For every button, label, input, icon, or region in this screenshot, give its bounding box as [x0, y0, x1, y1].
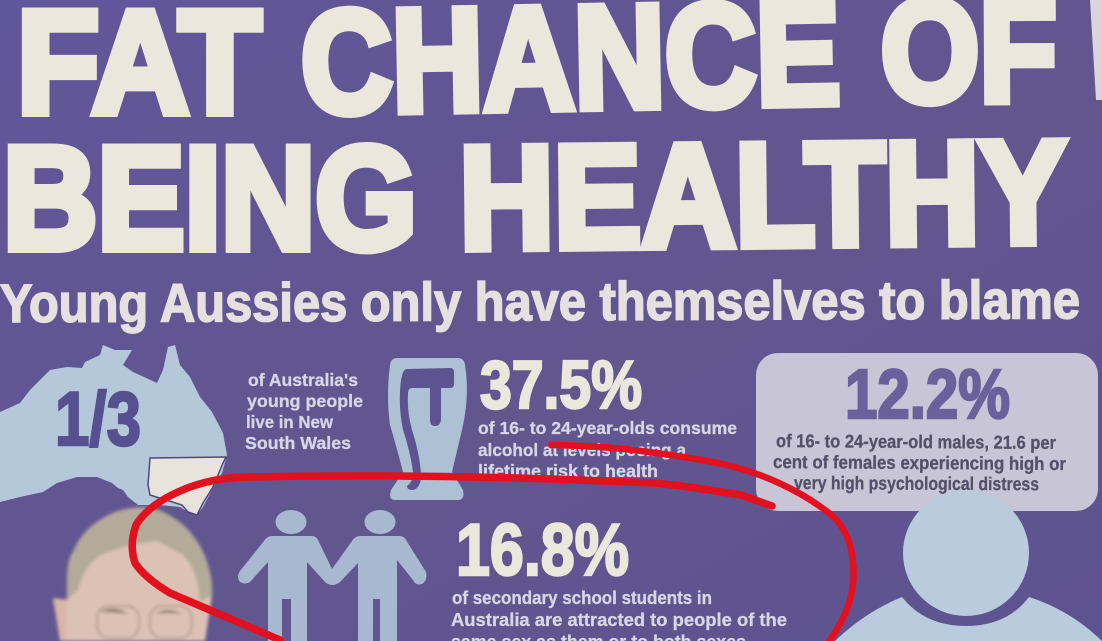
text: New South Wales [245, 370, 363, 453]
glasses and eyes [97, 606, 192, 638]
icon: person silhouette [835, 490, 1102, 641]
fraction 1/3: 1/3 [55, 377, 141, 462]
description: of secondary school students in [452, 588, 712, 608]
panel: 12.2% psychological distress: cent of females experiencing high or [773, 451, 1066, 474]
icon: Australia map with 1/3 [0, 345, 227, 515]
text: New South Wales: young people [247, 391, 363, 411]
stat: 37.5% [478, 347, 737, 481]
panel: 12.2% psychological distress: of 16- to 24-year-old males, 21.6 per [776, 430, 1056, 453]
paper edge [1090, 0, 1102, 100]
description: lifetime risk to health [478, 461, 658, 481]
icon: beer glass [388, 358, 467, 500]
description [451, 588, 787, 641]
panel: 12.2% psychological distress: very high psychological distress [794, 472, 1039, 494]
annotation: red hand-drawn circle [132, 445, 854, 641]
panel: 12.2% psychological distress [756, 353, 1098, 511]
text: New South Wales: of Australia's [248, 370, 358, 390]
panel: 12.2% psychological distress: 12.2% [845, 355, 1010, 433]
description: alcohol at levels posing a [478, 440, 686, 460]
description [478, 418, 737, 481]
text: New South Wales: live in New [246, 412, 333, 432]
stat: 16.8% [451, 510, 787, 641]
stat: 37.5%: 37.5% [480, 347, 642, 423]
New South Wales highlight [148, 457, 226, 515]
icon: two people holding hands [238, 510, 426, 641]
description: Australia are attracted to people of the [451, 610, 787, 630]
stat: 16.8%: 16.8% [456, 510, 629, 591]
title: BEING [3, 116, 417, 280]
description: of 16- to 24-year-olds consume [478, 418, 737, 438]
text: New South Wales: South Wales [245, 433, 351, 453]
title [3, 0, 1067, 279]
portrait: man in glasses [53, 508, 212, 641]
